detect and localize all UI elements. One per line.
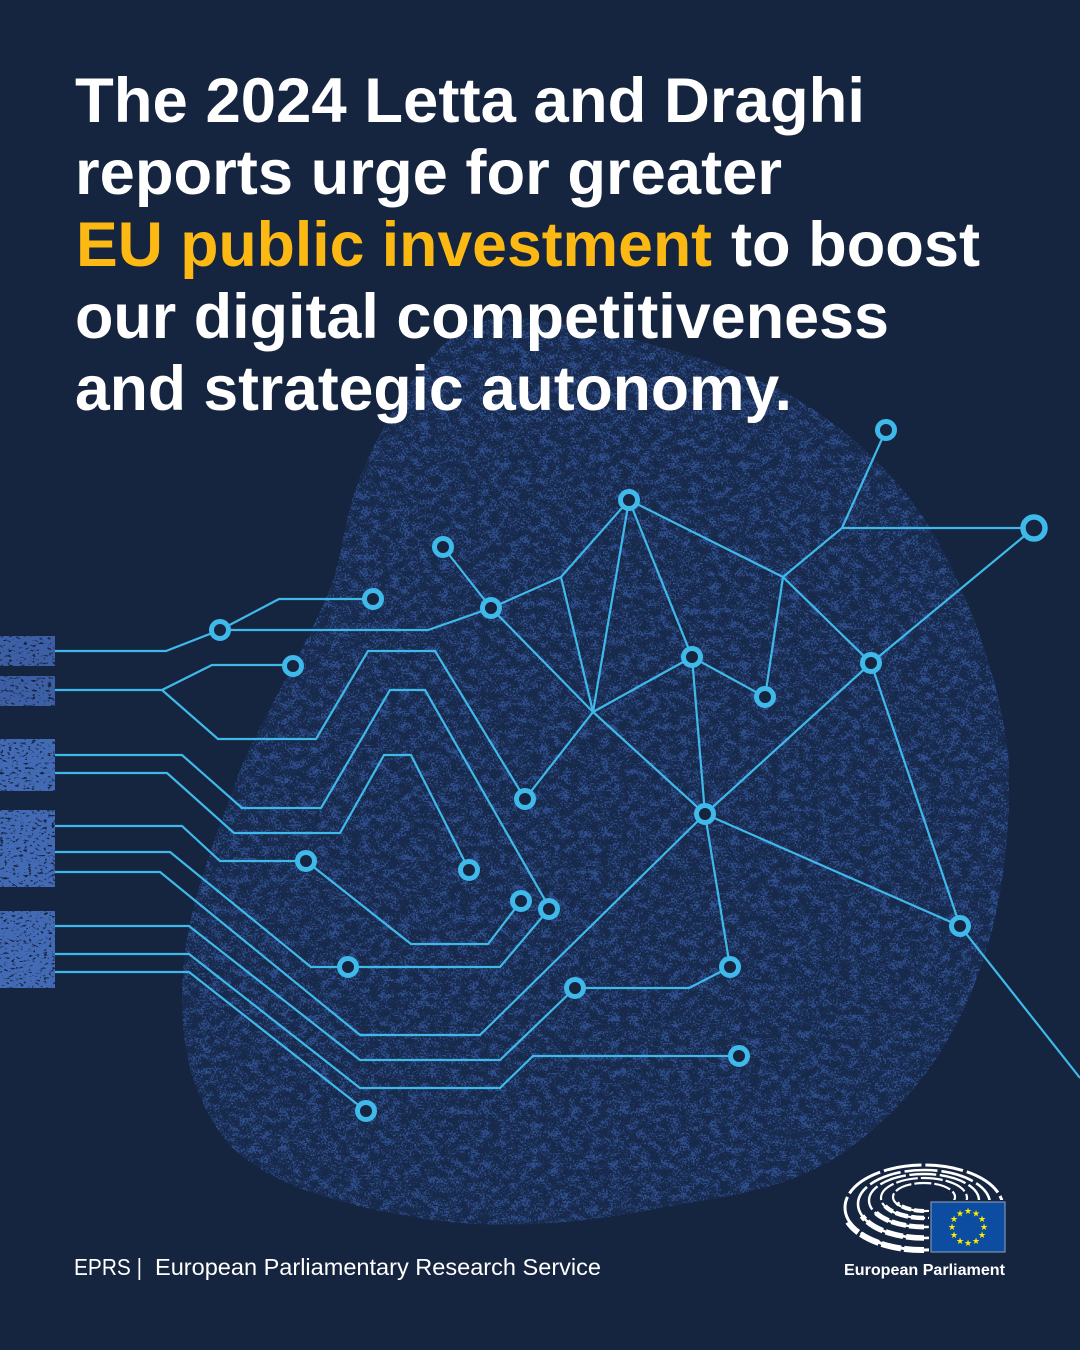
footer: EPRS credit: EPRS | — [74, 1254, 142, 1280]
icon: EU flag: ★ — [964, 1239, 972, 1249]
bar 3 — [0, 739, 55, 791]
textured blob — [182, 317, 1009, 1225]
bar 2 — [0, 676, 55, 706]
circuit lines — [55, 430, 1080, 1111]
icon: EU flag: ★ — [950, 1231, 958, 1241]
title — [75, 66, 980, 424]
title: The 2024 Letta and Draghi — [75, 66, 865, 136]
title: to boost — [731, 210, 980, 280]
icon: EU flag: ★ — [978, 1231, 986, 1241]
logo wordmark: European Parliament — [844, 1262, 1005, 1279]
icon: EU flag — [929, 1200, 1007, 1254]
title: and strategic autonomy. — [75, 354, 792, 424]
icon: EU flag: ★ — [972, 1209, 980, 1219]
title: reports urge for greater — [75, 138, 782, 208]
textured bars at left edge — [0, 636, 55, 988]
icon: EU flag: ★ — [980, 1223, 988, 1233]
footer: EPRS credit: European Parliamentary Research Service — [155, 1254, 601, 1280]
bar 1 — [0, 636, 55, 666]
title: EU public investment — [76, 210, 712, 280]
bar 4 — [0, 810, 55, 887]
bar 5 — [0, 911, 55, 988]
icon: EU flag: ★ — [978, 1215, 986, 1225]
icon: EU flag: ★ — [948, 1223, 956, 1233]
icon: EU flag: ★ — [956, 1209, 964, 1219]
logo: European Parliament — [844, 1165, 1007, 1279]
icon: EU flag: ★ — [972, 1237, 980, 1247]
network nodes — [212, 422, 1045, 1120]
icon: EU flag: ★ — [956, 1237, 964, 1247]
icon: hemicycle — [845, 1165, 1003, 1250]
icon: EU flag: ★ — [950, 1215, 958, 1225]
title: our digital competitiveness — [75, 282, 889, 352]
icon: EU flag: ★ — [964, 1207, 972, 1217]
